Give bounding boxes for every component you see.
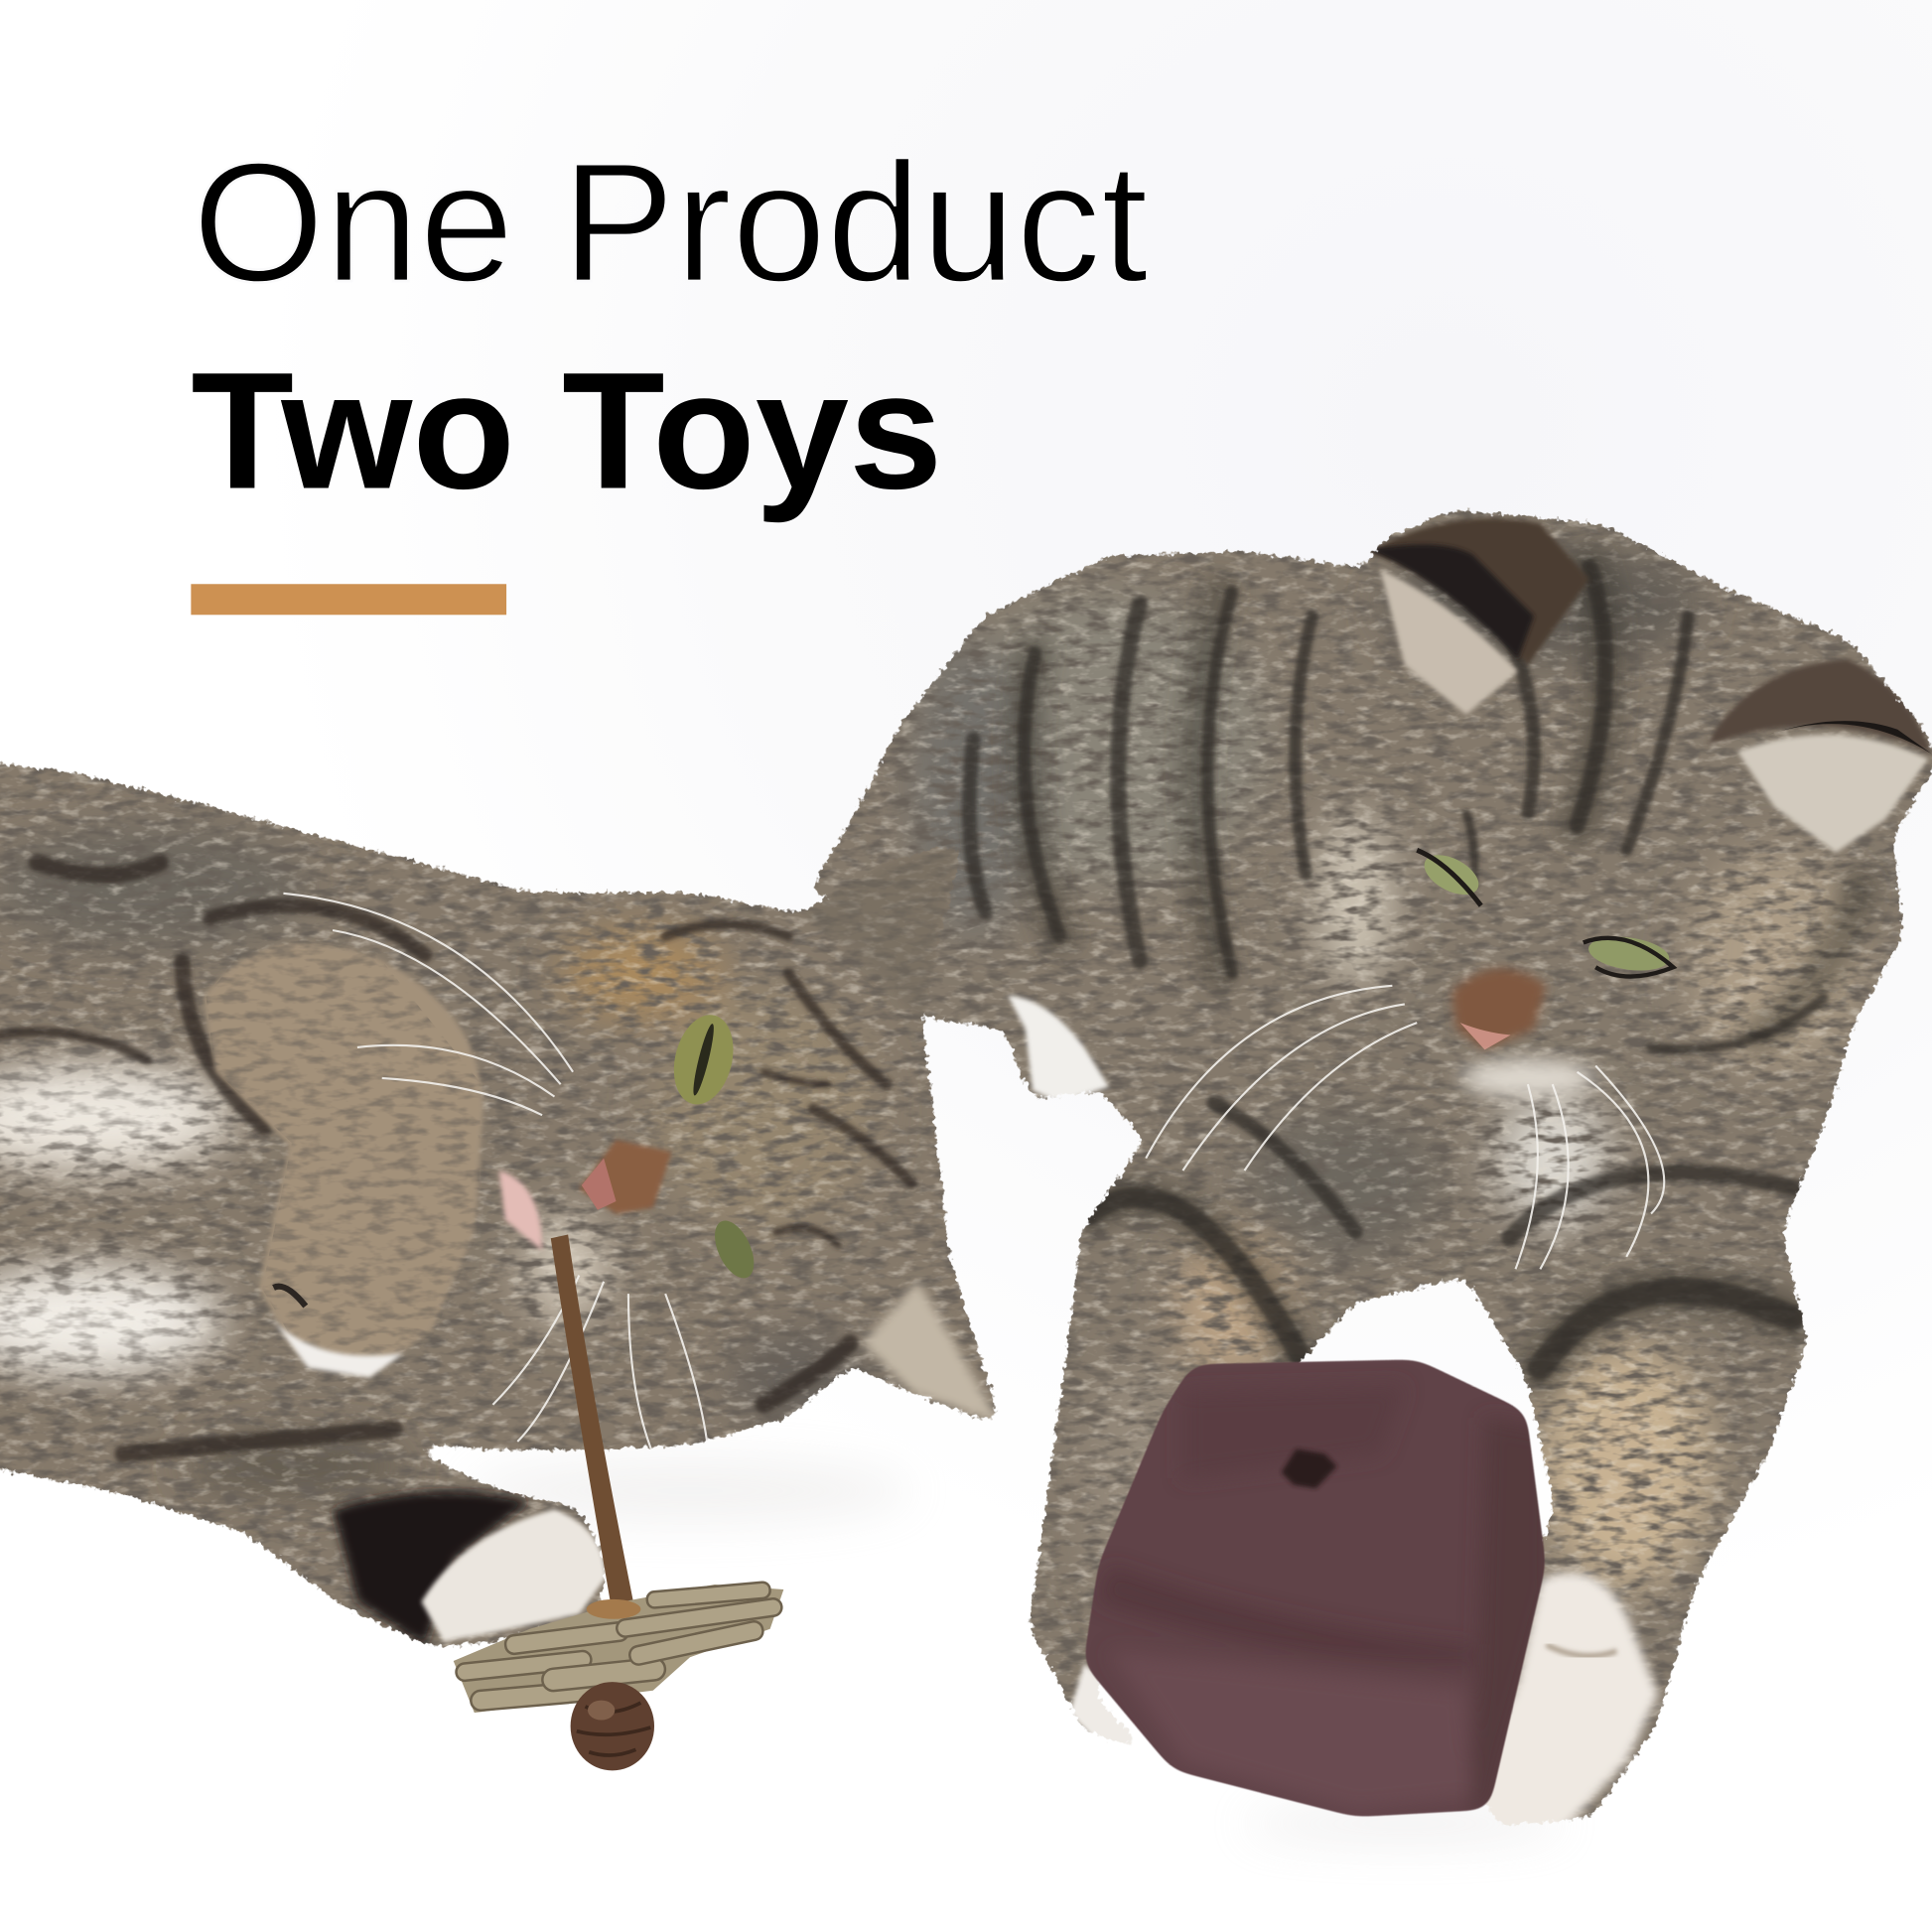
subtitle line: Two Toys: Two Toys <box>191 337 942 523</box>
white lower paw <box>421 1509 607 1641</box>
dark foreleg patch <box>333 1491 530 1646</box>
soft floor shadows <box>469 1458 1565 1841</box>
upper eye <box>665 1009 742 1111</box>
left ear black tip <box>1368 544 1534 659</box>
right cat tabby stripes <box>969 567 1824 1368</box>
purple fabric cube toy <box>1072 1355 1565 1824</box>
whiskers <box>1146 986 1664 1269</box>
left cat tabby stripes <box>0 863 911 1453</box>
cube shading <box>1097 1386 1553 1811</box>
white hind foot <box>1008 996 1109 1103</box>
nose and mouth <box>579 1140 671 1213</box>
matatabi stick toy <box>454 1235 783 1770</box>
whiskers <box>283 894 709 1453</box>
cat on the right playing with the cube <box>813 507 1932 1827</box>
left cat white belly highlights <box>0 1074 209 1361</box>
seed ball <box>571 1682 654 1770</box>
lower eye <box>707 1215 761 1284</box>
white paw under cube right <box>1466 1573 1658 1836</box>
left ear inner <box>1380 569 1518 715</box>
nose and muzzle <box>1451 969 1547 1049</box>
wafer slices <box>456 1582 782 1712</box>
stick <box>551 1235 633 1606</box>
title line: One Product: One Product <box>193 128 1149 318</box>
white paw under cube left <box>1069 1663 1189 1762</box>
ears <box>801 843 964 1023</box>
right ear back <box>1707 659 1932 755</box>
right cat broad dark bands <box>1024 567 1861 1368</box>
wafer stack backing <box>454 1585 783 1713</box>
raised front paw <box>204 943 483 1374</box>
right ear inner <box>1737 735 1928 853</box>
left ear brown back <box>1368 518 1589 665</box>
cube hole <box>1282 1449 1337 1488</box>
left cat colour zones <box>0 826 875 1493</box>
cat on the left chewing the stick <box>0 740 1011 1663</box>
right cat colour zones <box>911 548 1861 1626</box>
accent bar <box>191 584 506 615</box>
eyes <box>1418 847 1485 902</box>
